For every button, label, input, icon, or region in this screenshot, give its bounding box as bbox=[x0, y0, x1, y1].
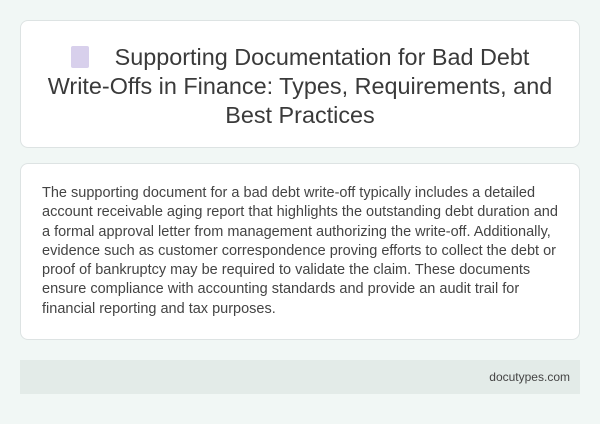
description text: evidence such as customer correspondence proving efforts to collect the debt or bbox=[42, 243, 556, 259]
description text: ensure compliance with accounting standards and provide an audit trail for bbox=[42, 281, 519, 297]
description text bbox=[42, 185, 558, 317]
footer text: docutypes.com bbox=[489, 370, 570, 384]
title panel bbox=[20, 20, 580, 148]
description panel bbox=[20, 163, 580, 340]
description text: The supporting document for a bad debt write-off typically includes a detailed bbox=[42, 185, 535, 201]
footer bar bbox=[20, 360, 580, 394]
description text: proof of bankruptcy may be required to validate the claim. These documents bbox=[42, 262, 530, 278]
title bbox=[48, 44, 552, 128]
description text: financial reporting and tax purposes. bbox=[42, 301, 276, 317]
title: Supporting Documentation for Bad Debt bbox=[115, 44, 529, 70]
description text: account receivable aging report that highlights the outstanding debt duration and bbox=[42, 204, 558, 220]
description text: a formal approval letter from management authorizing the write-off. Additionally, bbox=[42, 224, 551, 240]
title: Write-Offs in Finance: Types, Requirements, and bbox=[48, 73, 552, 99]
title: Best Practices bbox=[225, 102, 375, 128]
